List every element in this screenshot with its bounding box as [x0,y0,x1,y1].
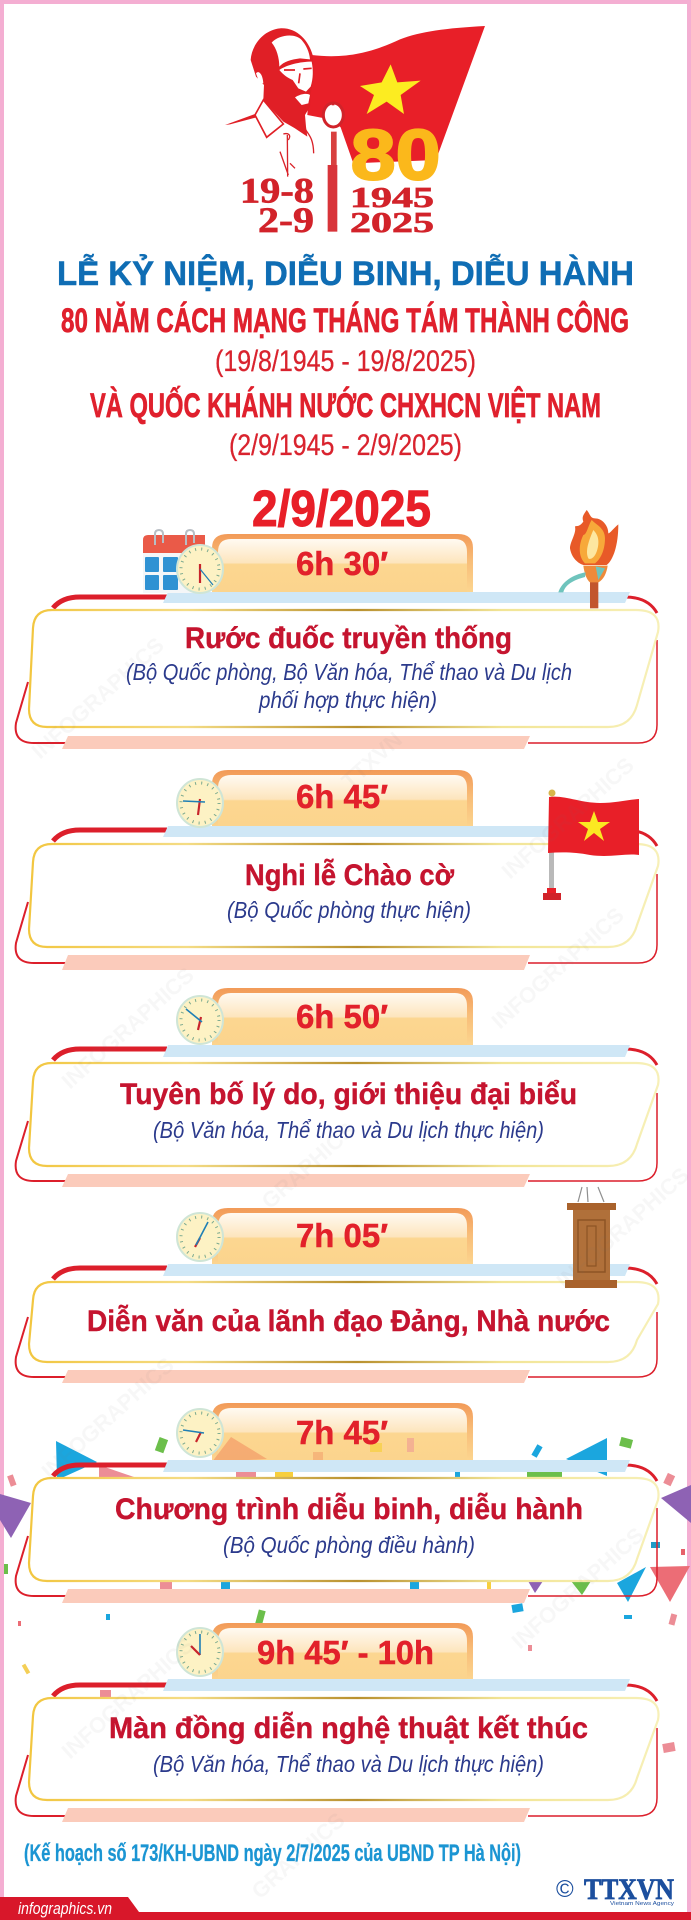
peach strip [62,1174,530,1187]
watermarks: GRAPHICS [247,1807,350,1904]
time tab [212,534,473,593]
panel: 7h05 speech [16,1187,659,1383]
blue strip [163,592,630,603]
footer bar: infographics.vn [18,1899,112,1918]
time tab [212,1208,473,1267]
activity title: Rước đuốc truyền thống [185,622,512,655]
agency note line 1: (Bộ Quốc phòng, Bộ Văn hóa, Thể thao và Du lịch [126,659,572,685]
time tab: 6h 45′ [296,778,388,815]
watermarks: GRAPHICS [257,1117,360,1214]
watermarks: INFOGRAPHICS [497,752,639,884]
footer bar [0,1897,691,1920]
watermarks [27,632,691,1904]
watermarks: INFOGRAPHICS [57,1632,199,1764]
activity title: Tuyên bố lý do, giới thiệu đại biểu [120,1078,577,1111]
activity title: Chương trình diễu binh, diễu hành [115,1492,583,1526]
icon: clock [177,996,223,1044]
time tab: 6h 50′ [296,998,388,1035]
activity title: Diễn văn của lãnh đạo Đảng, Nhà nước [87,1304,610,1338]
time tab: 9h 45′ - 10h [257,1634,434,1671]
peach strip [62,1589,530,1603]
watermarks: INFOGRAPHICS [507,1522,649,1654]
panel: 6h50 announcement [16,988,659,1187]
red outer frame [16,1049,657,1181]
red outer frame [16,1465,657,1596]
icon: calendar [143,530,205,593]
watermarks: INFOGRAPHICS [57,962,199,1094]
time tab: 7h 05′ [296,1217,388,1254]
logo dates: 1945 [350,183,434,214]
agency note line 2: phối hợp thực hiện) [258,687,437,713]
blue strip [163,826,630,837]
agency note: (Bộ Văn hóa, Thể thao và Du lịch thực hiện) [153,1117,544,1143]
icon: clock [177,545,223,593]
blue strip [163,1460,630,1472]
blue strip [163,1264,630,1276]
red outer frame [16,597,657,743]
title block: LỄ KỶ NIỆM, DIỄU BINH, DIỄU HÀNH [57,255,634,293]
confetti and bunting behind parade card [0,1437,691,1753]
panel: 6h30 torch relay [16,510,659,749]
time tab: 7h 45′ [296,1414,388,1451]
watermarks: INFOGRAPHICS [552,1162,691,1294]
title block: (19/8/1945 - 19/8/2025) [215,345,476,378]
peach strip [62,736,530,749]
activity title: Màn đồng diễn nghệ thuật kết thúc [109,1711,588,1745]
watermarks: TTXVN [337,727,407,794]
agency logo: © [556,1876,574,1903]
icon: clock [177,1409,223,1457]
gold content frame [29,1063,659,1166]
watermarks: INFOGRAPHICS [27,632,169,764]
time tab [212,1403,473,1462]
logo dates [240,171,434,240]
peach strip [62,1370,530,1383]
agency logo: Vietnam News Agency [610,1901,675,1907]
title block [57,255,634,462]
gold content frame [29,1698,659,1800]
red outer frame [16,1268,657,1377]
yellow star [360,64,421,114]
gold content frame [29,1282,659,1362]
panel: 7h45 parade [16,1403,659,1603]
red outer frame [16,1685,657,1816]
panel: 6h45 flag salute [16,770,659,970]
time tab [212,1623,473,1682]
peach strip [62,955,530,970]
number 80: 80 [351,115,441,195]
agency note: (Bộ Quốc phòng điều hành) [223,1532,475,1558]
title block: (2/9/1945 - 2/9/2025) [229,429,462,462]
icon: clock [177,1213,223,1261]
time tab: 6h 30′ [296,545,388,582]
portrait [225,28,314,177]
time tab [212,988,473,1047]
blue strip [163,1679,630,1691]
agency logo [556,1873,675,1907]
icon: torch [558,510,618,608]
watermarks: INFOGRAPHICS [487,902,629,1034]
agency note: (Bộ Quốc phòng thực hiện) [227,897,471,923]
logo dates: 2-9 [258,200,314,240]
icon: podium [565,1187,617,1288]
logo dates: 19-8 [240,171,314,211]
gold content frame [29,1478,659,1581]
blue strip [163,1045,630,1057]
logo: portrait, flag and 80th anniversary emblem [225,26,485,240]
peach strip [62,1808,530,1822]
agency note: (Bộ Văn hóa, Thể thao và Du lịch thực hiện) [153,1751,544,1777]
time tab [212,770,473,830]
red flag [307,26,485,163]
watermarks: INFOGRAPHICS [37,1352,179,1484]
icon: Vietnam flag [543,790,639,900]
activity title: Nghi lễ Chào cờ [245,858,455,892]
date heading: 2/9/2025 [252,480,431,537]
logo dates: 2025 [350,208,434,239]
microphone [323,103,343,232]
panel: 9h45 closing art performance [16,1623,659,1822]
icon: clock [177,1628,223,1676]
agency logo: TTXVN [584,1873,674,1906]
red outer frame [16,830,657,963]
gold content frame [29,610,659,727]
gold content frame [29,844,659,947]
icon: clock [177,779,223,827]
